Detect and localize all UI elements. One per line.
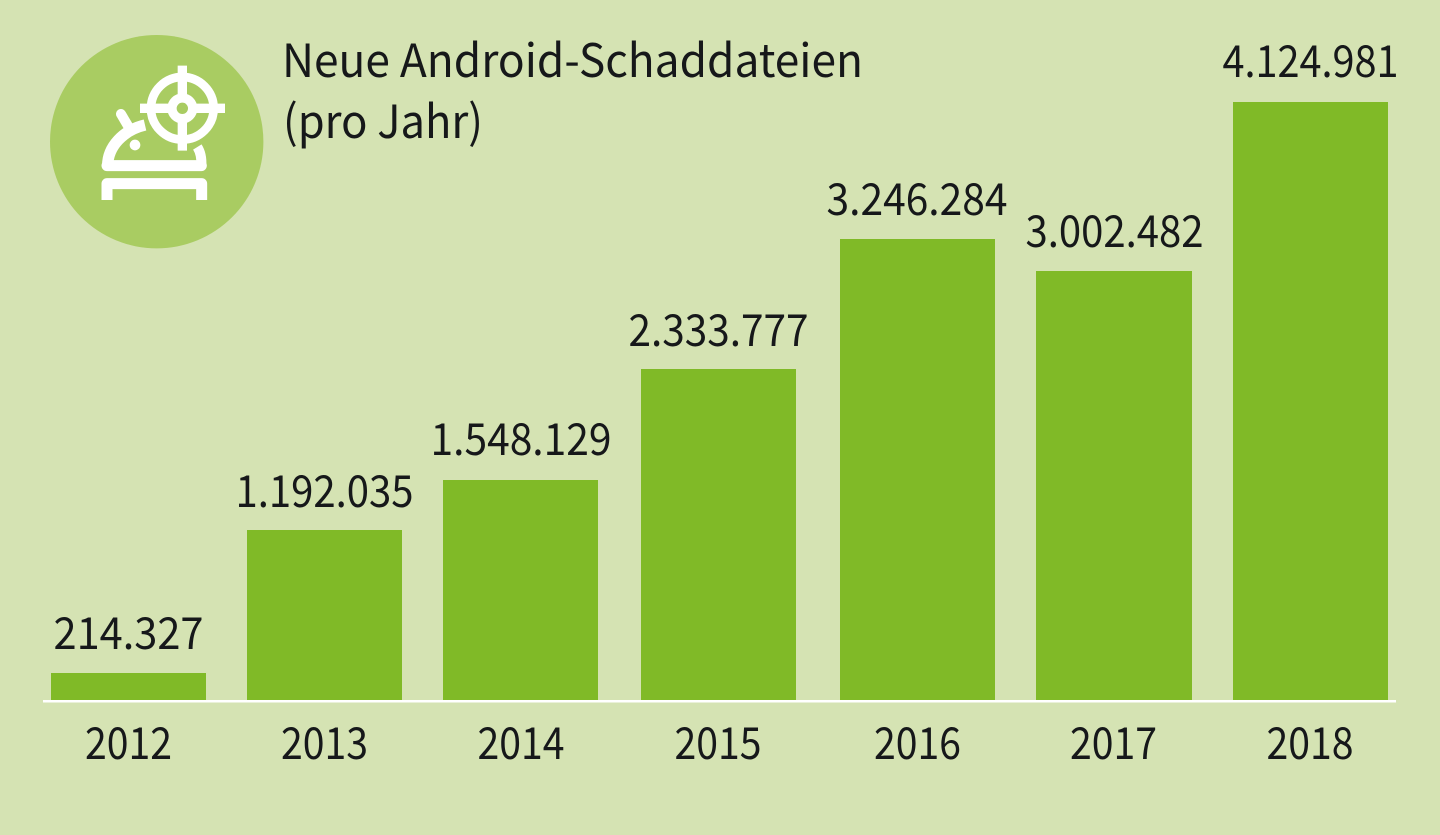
year labels: 2013	[281, 708, 368, 772]
title: (pro Jahr)	[283, 86, 483, 152]
year labels: 2018	[1266, 708, 1354, 772]
title	[282, 25, 863, 152]
value labels: 3.246.284	[826, 164, 1008, 228]
bars	[51, 102, 1388, 700]
year labels: 2014	[478, 708, 564, 772]
value labels: 1.548.129	[430, 404, 612, 468]
title: Neue Android-Schaddateien	[282, 25, 863, 91]
year labels: 2017	[1070, 708, 1157, 772]
value labels: 2.333.777	[628, 295, 808, 359]
value labels: 1.192.035	[236, 456, 414, 520]
year labels	[85, 708, 1354, 772]
year labels: 2012	[85, 708, 172, 772]
icon: android with crosshair	[50, 35, 263, 248]
year labels: 2015	[674, 708, 762, 772]
value labels	[54, 26, 1398, 662]
value labels: 3.002.482	[1026, 196, 1204, 260]
value labels: 4.124.981	[1222, 26, 1398, 90]
value labels: 214.327	[54, 598, 204, 662]
year labels: 2016	[874, 708, 961, 772]
axis line	[43, 700, 1396, 702]
